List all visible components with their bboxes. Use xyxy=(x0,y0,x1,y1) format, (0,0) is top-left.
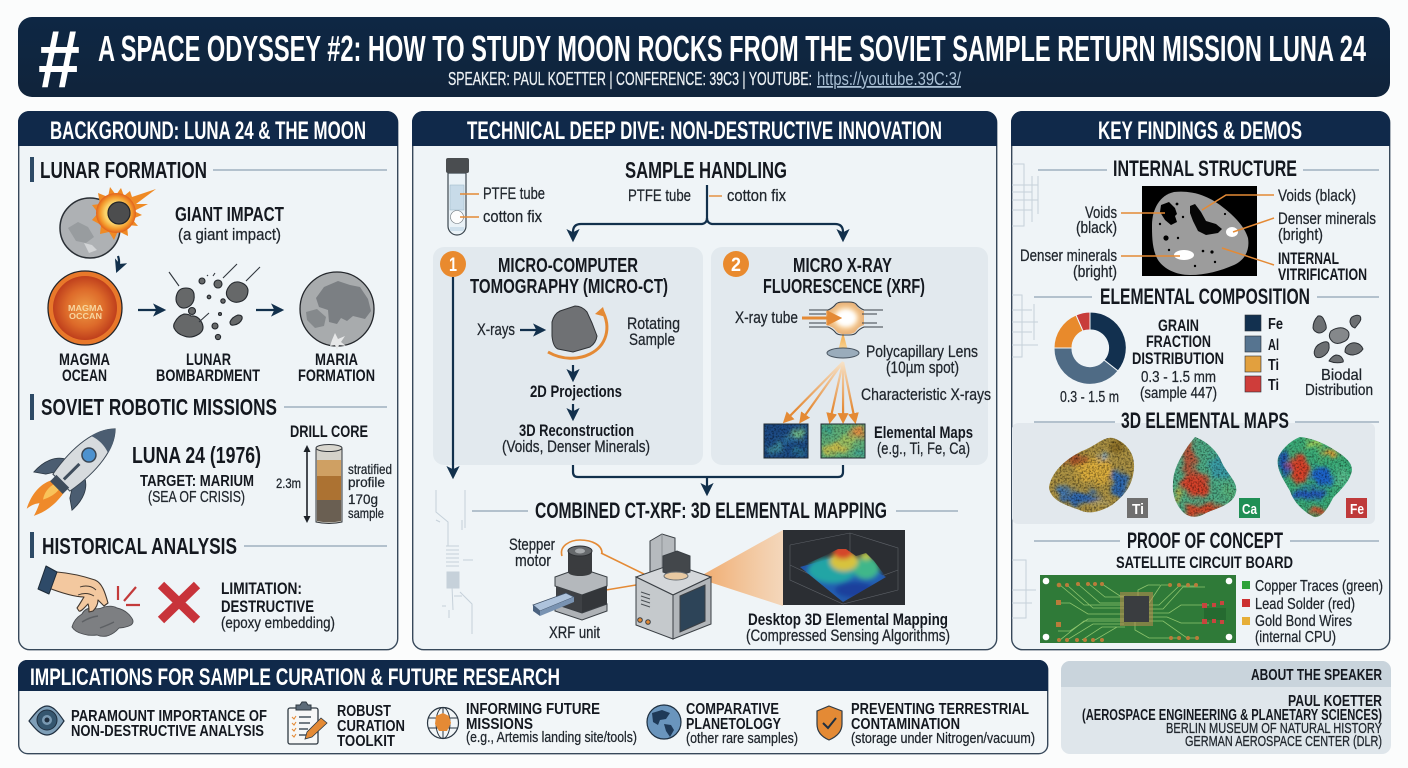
legend: elements: Ti xyxy=(1268,357,1279,374)
section heading: lunar formation: LUNAR FORMATION xyxy=(40,157,207,183)
badge: step 2: 2 xyxy=(731,255,741,276)
label: rotating sample: Rotating xyxy=(627,315,680,333)
heading: proof of concept: PROOF OF CONCEPT xyxy=(1127,528,1283,553)
labels: ct right: INTERNAL xyxy=(1278,250,1339,268)
subtitle: https://youtube.39C:3/ xyxy=(817,69,961,89)
chart: elemental map 1 xyxy=(764,424,808,458)
label: maria formation: MARIA xyxy=(315,350,358,369)
text: grain fraction: FRACTION xyxy=(1146,333,1211,351)
heading: internal structure: INTERNAL STRUCTURE xyxy=(1113,156,1297,181)
label: maria formation xyxy=(298,350,375,385)
text: paramount importance: NON-DESTRUCTIVE ANALYSIS xyxy=(71,723,264,740)
text: preventing contamination: PREVENTING TERRESTRIAL xyxy=(851,701,1029,718)
arrow: x-rays xyxy=(520,329,544,331)
beam: projection cone xyxy=(697,530,783,606)
panel: key findings xyxy=(1011,111,1390,650)
label: core notes: sample xyxy=(348,505,384,521)
label: rotating sample: Sample xyxy=(629,331,675,349)
text: giant impact: (a giant impact) xyxy=(178,225,281,244)
label: biodal distribution xyxy=(1305,367,1373,399)
label: core notes: stratified xyxy=(348,461,392,477)
heading: micro xrf: FLUORESCENCE (XRF) xyxy=(763,276,925,298)
labels: ct left: Voids xyxy=(1085,204,1117,222)
labels: ct right: Denser minerals xyxy=(1278,210,1376,228)
icon: magma ocean xyxy=(48,271,122,345)
label: lunar bombardment xyxy=(156,350,260,385)
badge: step 1: 1 xyxy=(449,255,457,276)
panel: about the speaker xyxy=(1061,661,1391,754)
title banner xyxy=(18,14,1390,105)
panel: implications xyxy=(18,660,1048,754)
heading: key findings: KEY FINDINGS & DEMOS xyxy=(1098,117,1302,145)
icon: rotating rock xyxy=(548,306,607,358)
label: core notes: 170g xyxy=(348,491,378,507)
text: limitation: LIMITATION: xyxy=(221,580,302,598)
text: robust curation toolkit xyxy=(337,703,405,750)
leaders: ct callouts xyxy=(1121,195,1274,265)
labels: ct right xyxy=(1278,187,1376,284)
arrows: characteristic x-rays xyxy=(785,362,855,421)
label: polycapillary lens: Polycapillary Lens xyxy=(866,343,978,361)
icon: earth globe xyxy=(647,705,681,739)
caption: desktop 3d elemental mapping: (Compressed Sensing Algorithms) xyxy=(746,627,950,645)
labels: sample handling: PTFE tube xyxy=(628,186,691,205)
text: limitation xyxy=(221,580,335,632)
badge: ti: Ti xyxy=(1132,501,1144,518)
icon: shield xyxy=(817,706,842,740)
legend: circuit board: Lead Solder (red) xyxy=(1255,596,1355,613)
text: paramount importance: PARAMOUNT IMPORTANCE OF xyxy=(71,708,267,725)
icon: clipboard xyxy=(288,702,327,744)
text: luna 24: (SEA OF CRISIS) xyxy=(148,489,245,506)
text: grain fraction xyxy=(1132,317,1224,402)
legend: elements: Al xyxy=(1268,337,1279,354)
legend: elements: Ti xyxy=(1268,377,1279,394)
heading: 3d elemental maps: 3D ELEMENTAL MAPS xyxy=(1121,408,1289,433)
labels: ct right: VITRIFICATION xyxy=(1278,266,1367,284)
badge: ca: Ca xyxy=(1242,501,1258,518)
icon: hash symbol: # xyxy=(38,14,80,105)
text: 3d reconstruction: 3D Reconstruction xyxy=(519,422,634,440)
chart: ca rock map xyxy=(1172,437,1236,517)
heading: technical deep dive: TECHNICAL DEEP DIVE: NON-DESTRUCTIVE INNOVATION xyxy=(467,117,942,145)
heading: sample handling: SAMPLE HANDLING xyxy=(625,157,787,183)
labels: sample handling xyxy=(628,186,786,205)
text: comparative planetology xyxy=(686,701,798,747)
arrow: sample handling branches xyxy=(573,185,843,240)
label: polycapillary lens: (10µm spot) xyxy=(886,359,959,377)
heading: proof of concept xyxy=(1034,528,1379,572)
text: informing future missions: INFORMING FUTURE xyxy=(466,701,600,718)
icon: rocket xyxy=(12,410,134,532)
label: biodal distribution: Biodal xyxy=(1321,367,1362,384)
chart: donut xyxy=(1054,312,1126,384)
icon: wire globe xyxy=(428,708,458,738)
labels: test tube: cotton fix xyxy=(483,207,542,226)
arrow: combine branches xyxy=(573,465,843,494)
label: magma ocean xyxy=(59,350,110,385)
chart: 3d elemental mapping plot xyxy=(783,530,905,605)
chart: circuit board xyxy=(1040,575,1236,643)
labels: ct right: Voids (black) xyxy=(1278,187,1356,205)
arrow: magma to bombardment xyxy=(138,309,164,311)
text: limitation: DESTRUCTIVE xyxy=(221,598,314,616)
text: luna 24: LUNA 24 (1976) xyxy=(132,442,261,468)
label: lunar bombardment: BOMBARDMENT xyxy=(156,366,260,385)
icon: full moon xyxy=(300,272,374,350)
label: characteristic x-rays: Characteristic X-rays xyxy=(861,386,991,404)
label: core notes: profile xyxy=(348,474,385,490)
label: elemental maps: Elemental Maps xyxy=(874,424,973,442)
text: grain fraction: GRAIN xyxy=(1158,317,1199,335)
arrow: to projections xyxy=(572,365,574,380)
text: grain fraction: 0.3 - 1.5 mm xyxy=(1141,369,1216,386)
text: giant impact: GIANT IMPACT xyxy=(175,204,284,226)
labels: ct left: (bright) xyxy=(1073,263,1117,281)
text: robust curation toolkit: TOOLKIT xyxy=(337,733,395,750)
labels: ct left: Denser minerals xyxy=(1020,247,1117,265)
labels: ct left: (black) xyxy=(1076,219,1117,237)
decorative circuit lines xyxy=(436,490,473,634)
label: rotating sample xyxy=(627,315,680,349)
label: stepper motor xyxy=(509,536,555,570)
text: informing future missions: MISSIONS xyxy=(466,716,533,733)
heading: implications: IMPLICATIONS FOR SAMPLE CURATION & FUTURE RESEARCH xyxy=(30,664,560,691)
label: elemental maps xyxy=(874,424,973,458)
legend: elements: Fe xyxy=(1268,316,1283,333)
arrow: step 1 down xyxy=(452,277,454,477)
label: maria formation: FORMATION xyxy=(298,366,375,385)
icon: red cross xyxy=(161,585,197,620)
icon: magma ocean: MAGMA xyxy=(68,304,103,313)
arrow: to reconstruction xyxy=(572,404,574,419)
label: biodal distribution: Distribution xyxy=(1305,382,1373,399)
arrow: impact to magma xyxy=(117,256,119,271)
icon: eye xyxy=(29,706,64,735)
badge: step 2 xyxy=(723,251,749,277)
icon: stepper motor xyxy=(533,540,652,620)
badge: fe: Fe xyxy=(1350,501,1364,518)
legend: circuit board: (internal CPU) xyxy=(1255,629,1336,646)
label: magma ocean: OCEAN xyxy=(62,366,107,385)
icon: xrf machine xyxy=(636,534,711,639)
text: comparative planetology: PLANETOLOGY xyxy=(686,716,781,733)
label: drill core: DRILL CORE xyxy=(290,422,368,441)
text: grain fraction: (sample 447) xyxy=(1140,385,1217,402)
text: paramount importance xyxy=(71,708,267,740)
label: x-ray tube: X-ray tube xyxy=(735,309,798,327)
text: robust curation toolkit: CURATION xyxy=(337,718,405,735)
band: elemental maps background xyxy=(1012,423,1375,524)
heading: background: BACKGROUND: LUNA 24 & THE MOON xyxy=(50,117,366,145)
text: preventing contamination: (storage under Nitrogen/vacuum) xyxy=(851,730,1035,747)
text: informing future missions: (e.g., Artemis landing site/tools) xyxy=(466,729,637,746)
label: 2d projections: 2D Projections xyxy=(530,383,622,401)
labels: ct left xyxy=(1020,204,1117,281)
heading: micro-ct: TOMOGRAPHY (MICRO-CT) xyxy=(470,276,668,298)
heading: elemental composition: ELEMENTAL COMPOSITION xyxy=(1100,284,1310,309)
chart: ti rock map xyxy=(1049,438,1134,512)
text: robust curation toolkit: ROBUST xyxy=(337,703,391,720)
label: stepper motor: motor xyxy=(515,552,551,570)
heading: combined ct-xrf: COMBINED CT-XRF: 3D ELEMENTAL MAPPING xyxy=(535,498,887,523)
icon: magma ocean: OCCAN xyxy=(69,312,102,321)
panel: technical deep dive xyxy=(412,111,997,650)
badge: fe xyxy=(1346,498,1367,518)
chart: ct slice xyxy=(1142,186,1257,276)
legend: circuit board: Gold Bond Wires xyxy=(1255,613,1352,630)
badge: ca xyxy=(1239,498,1260,518)
text: giant impact xyxy=(175,204,284,244)
label: stepper motor: Stepper xyxy=(509,536,555,554)
icon: test tube xyxy=(446,158,479,235)
text: limitation: (epoxy embedding) xyxy=(221,615,335,632)
labels: test tube: PTFE tube xyxy=(483,184,545,203)
text: speaker details: PAUL KOETTER xyxy=(1288,693,1382,710)
text: comparative planetology: COMPARATIVE xyxy=(686,701,779,718)
section heading: soviet robotic missions: SOVIET ROBOTIC MISSIONS xyxy=(41,394,277,420)
label: xrf unit: XRF unit xyxy=(549,624,600,642)
legend: circuit board xyxy=(1242,578,1383,646)
text: 3d reconstruction xyxy=(502,422,650,456)
heading: proof of concept: SATELLITE CIRCUIT BOARD xyxy=(1116,553,1293,572)
labels: sample handling: cotton fix xyxy=(727,186,786,205)
section heading: historical analysis: HISTORICAL ANALYSIS xyxy=(42,533,237,559)
text: preventing contamination: CONTAMINATION xyxy=(851,716,960,733)
badge: step 1 xyxy=(440,251,466,277)
labels: ct right: (bright) xyxy=(1278,226,1323,244)
chart: elemental map 2 xyxy=(819,424,866,458)
text: informing future missions xyxy=(466,701,637,746)
caption: desktop 3d elemental mapping: Desktop 3D Elemental Mapping xyxy=(748,611,948,629)
icon: drill core xyxy=(304,444,342,524)
label: lunar bombardment: LUNAR xyxy=(186,350,231,369)
legend: elements xyxy=(1245,315,1283,394)
text: preventing contamination xyxy=(851,701,1035,747)
chart: fe rock map xyxy=(1278,437,1352,518)
label: x-rays: X-rays xyxy=(477,321,515,339)
label: core notes: 2.3m xyxy=(276,475,301,491)
heading: micro-ct xyxy=(470,255,668,298)
decorative circuit lines xyxy=(1012,164,1038,618)
panel: background xyxy=(12,111,398,650)
text: 3d reconstruction: (Voids, Denser Minerals) xyxy=(502,438,650,456)
caption: desktop 3d elemental mapping xyxy=(746,611,950,645)
label: elemental maps: (e.g., Ti, Fe, Ca) xyxy=(877,440,970,458)
icon: lunar bombardment xyxy=(169,264,260,340)
label: donut caption: 0.3 - 1.5 m xyxy=(1060,389,1119,406)
heading: micro xrf: MICRO X-RAY xyxy=(793,255,892,277)
panel: micro-ct xyxy=(433,247,703,465)
text: luna 24: TARGET: MARIUM xyxy=(140,473,254,490)
labels: test tube xyxy=(483,184,545,226)
label: core notes xyxy=(276,461,392,521)
icon: giant impact xyxy=(60,187,156,258)
text: luna 24 xyxy=(132,442,261,506)
section heading: historical analysis xyxy=(30,532,387,559)
icon: x-ray tube xyxy=(802,302,883,358)
section heading: lunar formation xyxy=(30,157,387,183)
label: magma ocean: MAGMA xyxy=(59,350,110,369)
text: speaker details xyxy=(1082,693,1382,750)
heading: micro xrf xyxy=(763,255,925,298)
panel: micro xrf xyxy=(711,247,991,465)
label: polycapillary lens xyxy=(866,343,978,377)
text: comparative planetology: (other rare samples) xyxy=(686,730,798,747)
subtitle: SPEAKER: PAUL KOETTER | CONFERENCE: 39C3 | YOUTUBE: xyxy=(448,69,812,89)
arrow: bombardment to maria xyxy=(256,309,282,311)
badge: ti xyxy=(1127,498,1148,518)
icon: impact marks xyxy=(118,586,140,605)
text: grain fraction: DISTRIBUTION xyxy=(1132,350,1224,368)
icon: grains xyxy=(1313,315,1363,363)
icon: hand and rock xyxy=(38,566,133,636)
heading: micro-ct: MICRO-COMPUTER xyxy=(498,255,638,277)
